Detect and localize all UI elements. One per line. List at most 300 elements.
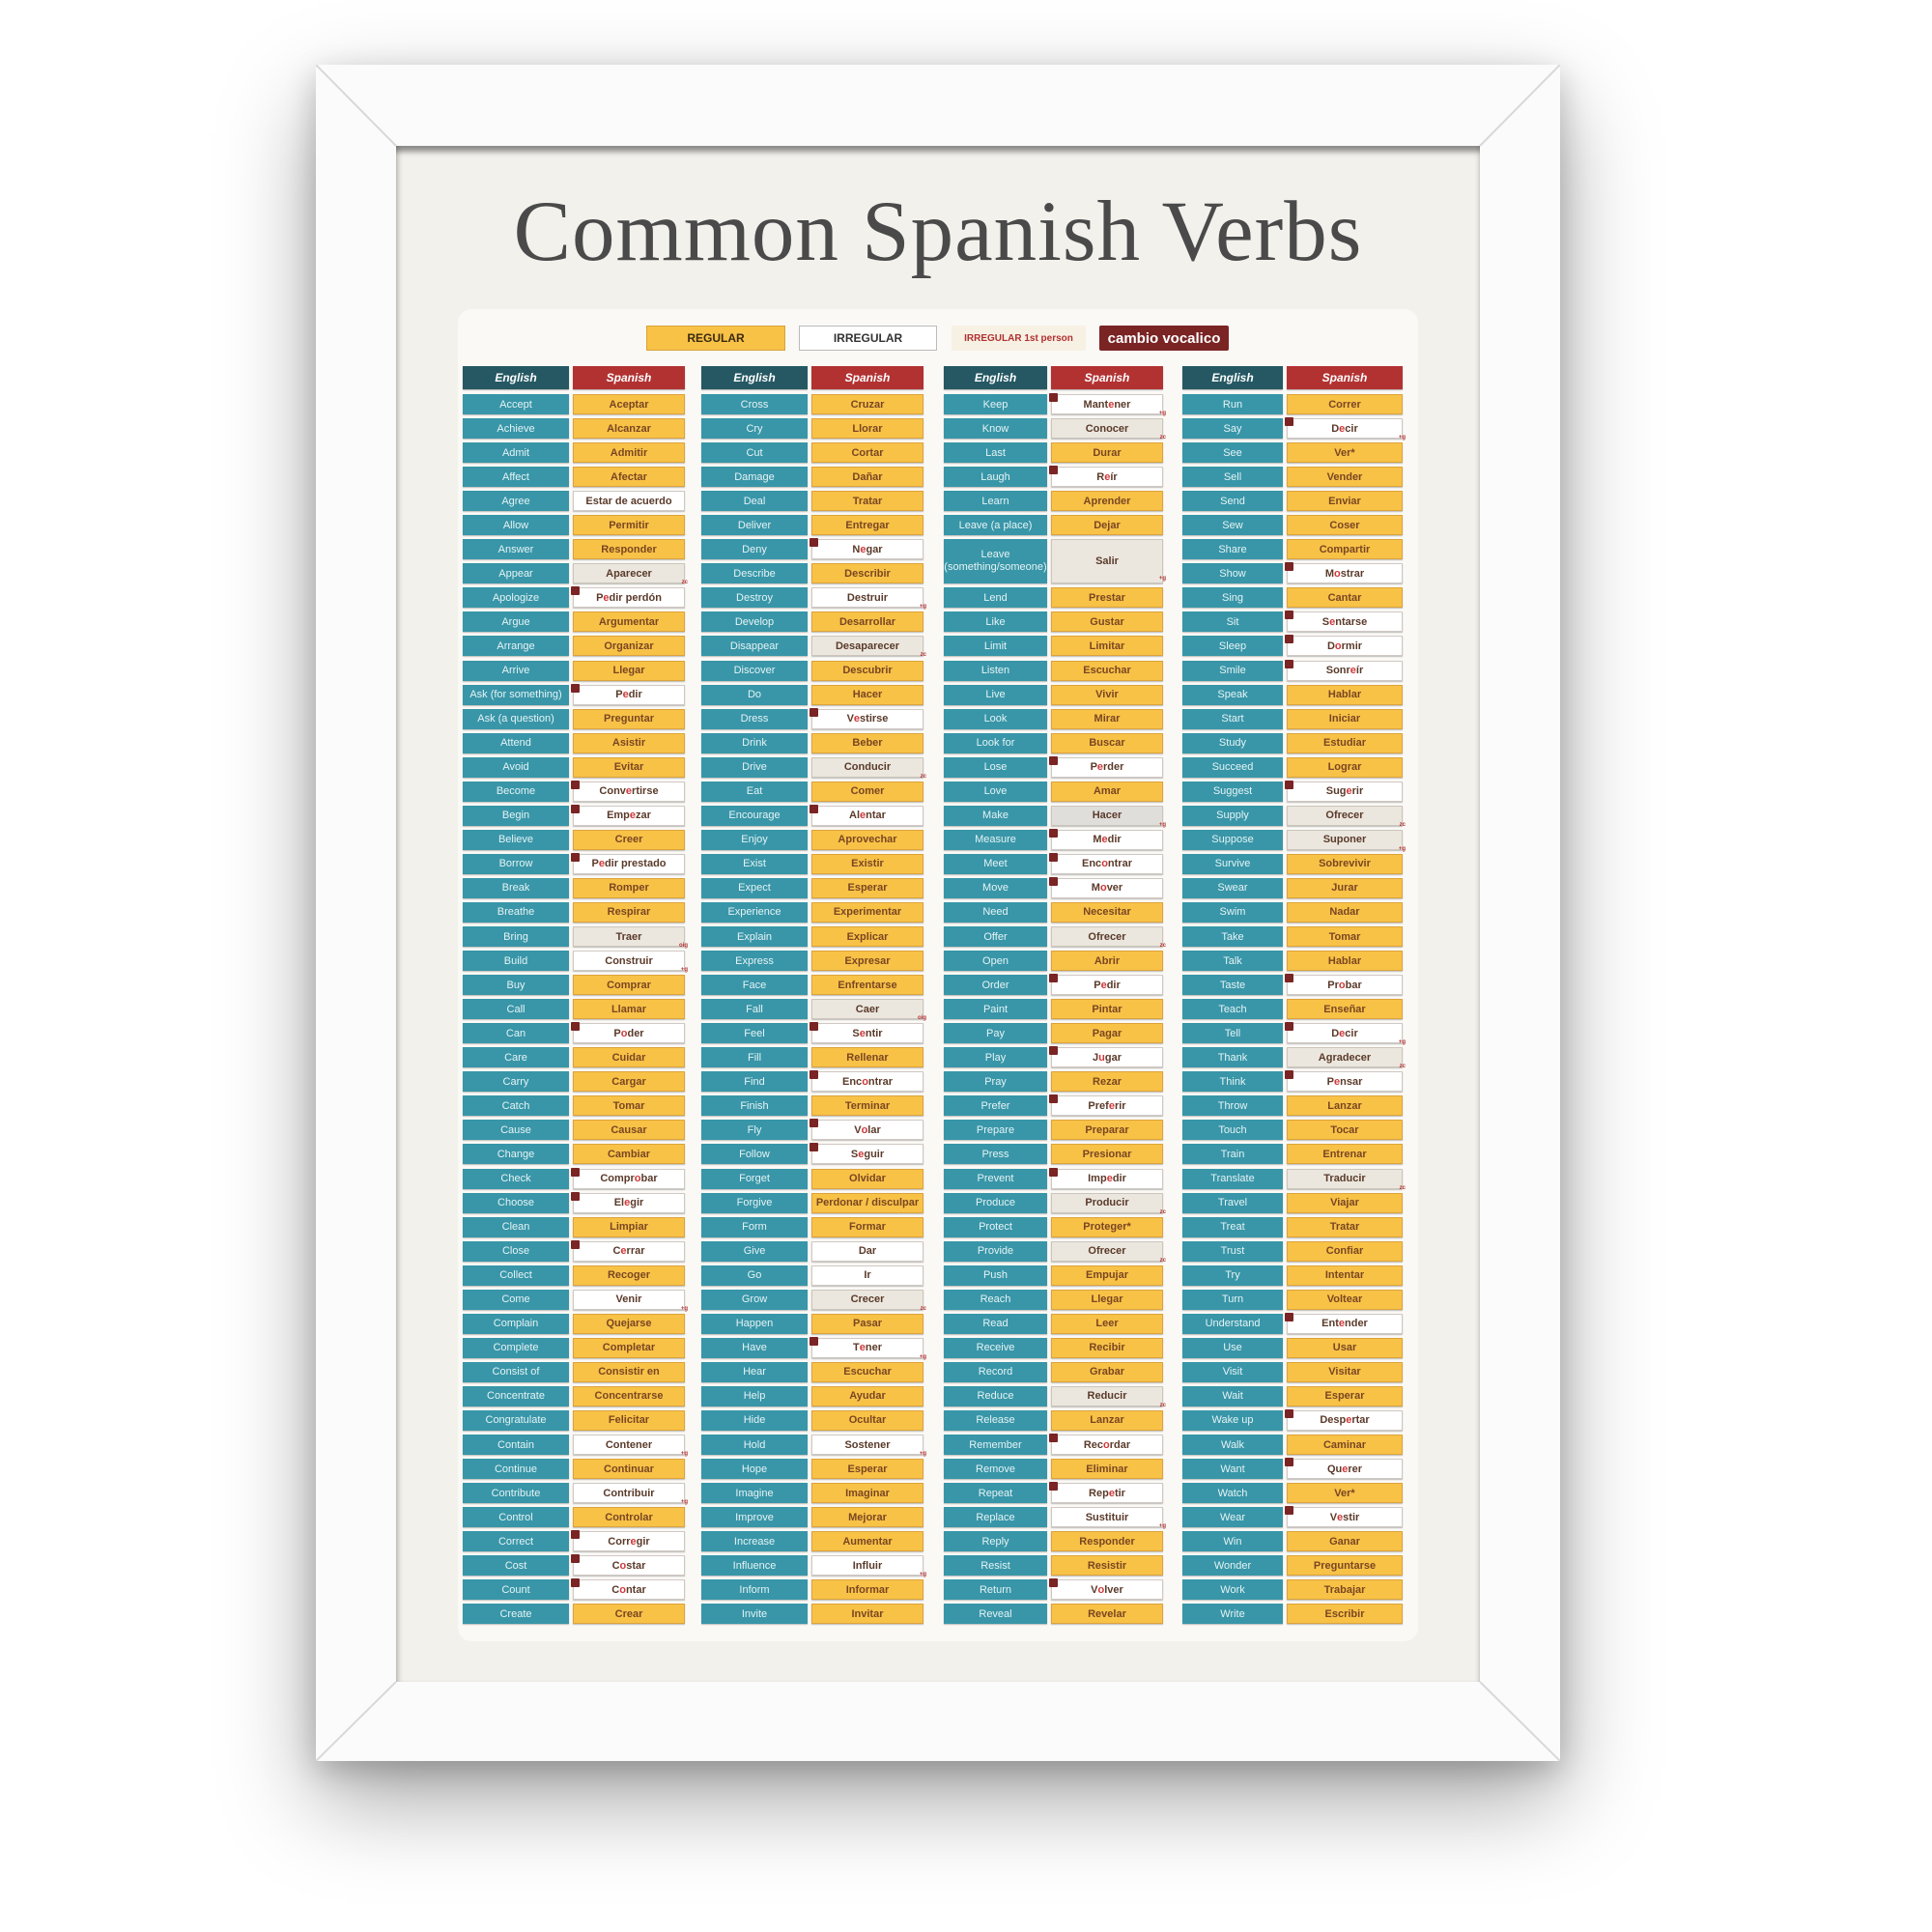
panel: column 4: Suggest <box>1213 785 1252 797</box>
panel: column 2: Encourage <box>728 810 781 821</box>
panel: column 1: Appear <box>498 568 533 580</box>
panel: column 2: Feel <box>744 1028 765 1039</box>
panel: column 1: Organizar <box>604 640 654 652</box>
panel: column 4: Compartir <box>1320 544 1370 555</box>
panel: column 1: Compr bar <box>600 1173 658 1184</box>
panel: column 4: Survive <box>1215 858 1250 869</box>
panel: column 4: Trabajar <box>1324 1584 1365 1596</box>
panel: column 1: Answer <box>498 544 533 555</box>
panel: column 2: Enc ntrar <box>842 1076 893 1088</box>
panel: column 2: Explain <box>737 931 772 943</box>
panel: column 3: zc <box>1160 435 1166 440</box>
panel: column 3: Need <box>982 906 1009 918</box>
panel: column 3: Recibir <box>1089 1342 1125 1353</box>
panel: column 4: Enseñar <box>1323 1004 1366 1015</box>
panel: column 4: Usar <box>1333 1342 1356 1353</box>
panel: column 2: V lar <box>854 1124 881 1136</box>
panel: column 2: Experimentar <box>834 906 901 918</box>
panel: column 1: Cost <box>505 1560 526 1572</box>
panel: column 1: Believe <box>498 834 533 845</box>
panel: column 1: Traer <box>616 931 641 943</box>
legend: cambio vocalico: cambio vocalico <box>1108 330 1220 346</box>
panel: column 4: Ver* <box>1334 447 1355 459</box>
panel: column 1: Causar <box>611 1124 647 1136</box>
panel: column 1: Check <box>500 1173 531 1184</box>
panel: column 3: Look <box>984 713 1007 724</box>
panel: column 2: Have <box>742 1342 767 1353</box>
panel: column 3: Produce <box>976 1197 1015 1208</box>
panel: column 4: Vender <box>1327 471 1362 483</box>
panel: column 2: T ner <box>853 1342 882 1353</box>
panel: column 3: Amar <box>1094 785 1121 797</box>
panel: column 3: Open <box>982 955 1009 967</box>
panel: column 3: +g <box>1159 1523 1166 1529</box>
panel: column 3: zc <box>1160 943 1166 949</box>
panel: column 3: o <box>1103 1439 1110 1451</box>
panel: column 1: Ask (a question) <box>477 713 554 724</box>
panel: column 2: Terminar <box>845 1100 890 1112</box>
panel: column 2: Happen <box>736 1318 773 1329</box>
legend: irregular: IRREGULAR <box>834 331 902 345</box>
title: Common Spanish Verbs <box>514 185 1362 279</box>
panel: column 3: Pay <box>986 1028 1005 1039</box>
panel: column 4: Thank <box>1218 1052 1247 1064</box>
panel: column 4: Entrenar <box>1322 1149 1367 1160</box>
panel: column 3: Sustituir <box>1086 1512 1128 1523</box>
panel: column 2: Existir <box>851 858 884 869</box>
panel: column 1: e <box>620 1245 627 1257</box>
panel: column 3: Provide <box>978 1245 1013 1257</box>
panel: column 3: Aprender <box>1084 496 1130 507</box>
panel: column 4: e <box>1350 665 1356 676</box>
panel: column 2: Describir <box>844 568 891 580</box>
panel: column 3: Necesitar <box>1083 906 1131 918</box>
panel: column 1: Romper <box>609 882 649 894</box>
panel: column 2: Descubrir <box>842 665 893 676</box>
panel: column 4: Tell <box>1225 1028 1240 1039</box>
panel: column 4: Ganar <box>1329 1536 1360 1548</box>
panel: column 1: Felicitar <box>609 1414 649 1426</box>
panel: column 4: Smile <box>1219 665 1246 676</box>
panel: column 4: Visit <box>1223 1366 1242 1378</box>
panel: column 3: Llegar <box>1091 1293 1122 1305</box>
panel: column 3: e <box>1104 471 1110 483</box>
panel: column 3: Paint <box>983 1004 1008 1015</box>
panel: column 2: +g <box>920 1572 926 1577</box>
panel: column 2: Experience <box>727 906 781 918</box>
panel: column 4: Tratar <box>1330 1221 1359 1233</box>
panel: column 3: P dir <box>1094 980 1121 991</box>
panel: column 1: Evitar <box>614 761 643 773</box>
panel: column 2: +g <box>920 1451 926 1457</box>
panel: column 1: Accept <box>499 398 532 410</box>
panel: column 4: e <box>1329 616 1335 628</box>
panel: column 2: Go <box>748 1269 761 1281</box>
panel: column 3: Ofrecer <box>1088 1245 1126 1257</box>
panel: column 3: Mirar <box>1094 713 1120 724</box>
panel: column 3: Release <box>976 1414 1015 1426</box>
panel: column 2: Ocultar <box>849 1414 886 1426</box>
panel: column 2: V stirse <box>847 713 888 724</box>
panel: column 1: Venir <box>616 1293 641 1305</box>
panel: column 3: Order <box>981 980 1009 991</box>
panel: column 1: Congratulate <box>485 1414 547 1426</box>
panel: column 3: Ofrecer <box>1088 931 1126 943</box>
panel: column 3: e <box>1107 1173 1113 1184</box>
panel: column 1: Aceptar <box>610 398 648 410</box>
panel: column 1: Choose <box>497 1197 534 1208</box>
panel: column 3: Eliminar <box>1086 1463 1128 1475</box>
panel: column 2: Imagine <box>735 1488 774 1499</box>
panel: column 2: Esperar <box>848 882 887 894</box>
panel: column 1: e <box>603 592 610 604</box>
panel: column 1: Allow <box>503 520 528 531</box>
panel: column 2: Caer <box>856 1004 879 1015</box>
panel: column 3: o <box>1100 882 1107 894</box>
panel: column 1: Argue <box>501 616 530 628</box>
panel: column 3: J gar <box>1093 1052 1122 1064</box>
panel: column 1: +g <box>681 967 688 973</box>
panel: column 2: Fill <box>748 1052 761 1064</box>
panel: column 4: Preguntarse <box>1314 1560 1376 1572</box>
panel: column 3: +g <box>1159 576 1166 582</box>
panel: column 3: Gustar <box>1090 616 1124 628</box>
panel: column 3: Know <box>982 423 1009 435</box>
panel: column 2: Cut <box>746 447 763 459</box>
panel: column 1: +g <box>681 1306 688 1312</box>
panel: column 1: Catch <box>502 1100 529 1112</box>
panel: column 2: Olvidar <box>849 1173 886 1184</box>
panel: column 1: P dir <box>615 689 642 700</box>
header 4: Spanish <box>1322 371 1367 384</box>
panel: column 3: Reduce <box>978 1390 1013 1402</box>
panel: column 2: Formar <box>849 1221 886 1233</box>
panel: column 1: e <box>599 858 605 869</box>
panel: column 2: Deny <box>742 544 767 555</box>
panel: column 3: e <box>1109 1488 1115 1499</box>
panel: column 3: e <box>1109 1100 1115 1112</box>
panel: column 3: M dir <box>1093 834 1122 845</box>
panel: column 2: Cry <box>746 423 763 435</box>
panel: column 1: Consist of <box>493 1366 539 1378</box>
panel: column 3: Reducir <box>1088 1390 1126 1402</box>
panel: column 3: Lanzar <box>1090 1414 1124 1426</box>
panel: column 4: S ntarse <box>1322 616 1367 628</box>
panel: column 4: Wear <box>1220 1512 1245 1523</box>
panel: column 1: Complete <box>493 1342 539 1353</box>
panel: column 3: Press <box>981 1149 1009 1160</box>
panel: column 1: Contribuir <box>603 1488 655 1499</box>
panel: column 1: Cargar <box>611 1076 646 1088</box>
panel: column 4: Agradecer <box>1319 1052 1371 1064</box>
panel: column 3: u <box>1098 1052 1105 1064</box>
panel: column 1: Concentrate <box>487 1390 545 1402</box>
panel: column 1: Alcanzar <box>607 423 651 435</box>
panel: column 4: Tomar <box>1329 931 1360 943</box>
panel: column 1: Attend <box>500 737 531 749</box>
panel: column 3: Responder <box>1079 1536 1135 1548</box>
panel: column 4: Watch <box>1218 1488 1247 1499</box>
panel: column 4: Visitar <box>1328 1366 1361 1378</box>
panel: column 4: Desp rtar <box>1320 1414 1370 1426</box>
panel: column 1: Bring <box>503 931 528 943</box>
panel: column 3: Preparar <box>1085 1124 1129 1136</box>
panel: column 4: Estudiar <box>1323 737 1366 749</box>
panel: column 1: Asistir <box>612 737 645 749</box>
panel: column 3: Escuchar <box>1083 665 1131 676</box>
panel: column 1: P dir perdón <box>596 592 662 604</box>
panel: column 2: Invite <box>742 1608 767 1620</box>
frame <box>316 65 1560 1761</box>
panel: column 3: Read <box>982 1318 1009 1329</box>
panel: column 1: Permitir <box>609 520 649 531</box>
panel: column 2: Eat <box>747 785 762 797</box>
panel: column 3: Move <box>982 882 1009 894</box>
panel: column 3: Pintar <box>1092 1004 1122 1015</box>
legend: cambio vocalico <box>1099 326 1229 351</box>
panel: column 4: Ver* <box>1334 1488 1355 1499</box>
panel: column 4: Pr bar <box>1327 980 1362 991</box>
panel: column 3: Pray <box>984 1076 1007 1088</box>
panel: column 4: Teach <box>1218 1004 1247 1015</box>
panel: column 2: Aumentar <box>842 1536 893 1548</box>
panel: column 3: Durar <box>1093 447 1122 459</box>
panel: column 4: Talk <box>1223 955 1242 967</box>
panel: column 4: Say <box>1224 423 1241 435</box>
panel: column 1: Break <box>502 882 529 894</box>
panel: column 1: Creer <box>615 834 642 845</box>
panel: column 3: Rec rdar <box>1084 1439 1130 1451</box>
panel: column 3: Rep tir <box>1089 1488 1125 1499</box>
legend: regular: REGULAR <box>687 331 745 345</box>
panel: column 4: Caminar <box>1323 1439 1366 1451</box>
panel: column 2: e <box>858 1149 864 1160</box>
panel: column 1: Correct <box>498 1536 533 1548</box>
panel: column 3: Repeat <box>979 1488 1012 1499</box>
panel: column 2: Comer <box>851 785 884 797</box>
panel: column 3: Empujar <box>1086 1269 1128 1281</box>
panel: column 4: Hablar <box>1328 689 1361 700</box>
panel: column 2: Dañar <box>852 471 883 483</box>
panel: column 3: Reach <box>980 1293 1010 1305</box>
panel: column 4: Take <box>1221 931 1244 943</box>
panel: column 2: Conducir <box>844 761 891 773</box>
panel: column 3: Last <box>985 447 1006 459</box>
panel: column 3: P rder <box>1091 761 1123 773</box>
panel: column 1: Recoger <box>608 1269 650 1281</box>
panel: column 2: Esperar <box>848 1463 887 1475</box>
legend: irregular 1st person <box>952 326 1086 351</box>
panel: column 4: e <box>1346 1414 1351 1426</box>
panel: column 4: Wake up <box>1211 1414 1254 1426</box>
panel: column 1: oig <box>679 943 688 949</box>
panel: column 1: Borrow <box>499 858 532 869</box>
panel: column 3: e <box>1101 834 1108 845</box>
panel: column 4: Swim <box>1220 906 1245 918</box>
panel: column 4: Train <box>1221 1149 1244 1160</box>
panel: column 4: Send <box>1220 496 1245 507</box>
panel: column 1: Clean <box>502 1221 529 1233</box>
panel: column 1: C star <box>612 1560 645 1572</box>
panel: column 4: Ent nder <box>1321 1318 1368 1329</box>
panel: column 4: Start <box>1221 713 1244 724</box>
panel: column 3: Leer <box>1095 1318 1119 1329</box>
panel: column 2: Forget <box>739 1173 770 1184</box>
header 1: Spanish <box>607 371 651 384</box>
panel: column 1: Affect <box>502 471 529 483</box>
panel: column 2: Llorar <box>852 423 883 435</box>
panel: column 3: Look for <box>977 737 1014 749</box>
legend: irregular 1st person: IRREGULAR 1st person <box>964 332 1073 344</box>
panel: column 2: Mejorar <box>848 1512 887 1523</box>
panel: column 2: Beber <box>852 737 883 749</box>
panel: column 2: Invitar <box>851 1608 883 1620</box>
header 3: English <box>975 371 1016 384</box>
panel: column 2: Deal <box>744 496 765 507</box>
panel: column 2: oig <box>918 1015 926 1021</box>
panel: column 4: Cantar <box>1328 592 1361 604</box>
panel: column 4: Succeed <box>1212 761 1253 773</box>
panel: column 2: Do <box>748 689 761 700</box>
panel: column 1: Achieve <box>497 423 535 435</box>
panel: column 4: Want <box>1220 1463 1245 1475</box>
panel: column 2: e <box>860 1028 866 1039</box>
panel: column 3: Enc ntrar <box>1082 858 1132 869</box>
panel: column 4: Win <box>1224 1536 1241 1548</box>
panel: column 2: Finish <box>740 1100 769 1112</box>
panel: column 4: e <box>1334 1076 1340 1088</box>
panel: column 1: Care <box>504 1052 527 1064</box>
panel: column 4: Swear <box>1217 882 1248 894</box>
table card <box>458 309 1418 1641</box>
panel: column 1: e <box>631 1536 637 1548</box>
panel: column 4: e <box>1339 1028 1345 1039</box>
panel: column 4: e <box>1337 1512 1343 1523</box>
panel: column 2: o <box>862 1124 867 1136</box>
panel: column 3 <box>943 366 1166 1625</box>
panel: column 4: Intentar <box>1325 1269 1364 1281</box>
header 4: English <box>1211 371 1254 384</box>
panel: column 1: o <box>635 1173 641 1184</box>
panel: column 4: Treat <box>1220 1221 1245 1233</box>
panel: column 1: Build <box>504 955 527 967</box>
panel: column 2: e <box>860 810 866 821</box>
panel: column 3: o <box>1098 1584 1104 1596</box>
panel: column 4: Walk <box>1221 1439 1244 1451</box>
panel: column 1: Controlar <box>605 1512 653 1523</box>
panel: column 3: Receive <box>977 1342 1014 1353</box>
panel: column 3: Record <box>979 1366 1012 1378</box>
panel: column 4: Touch <box>1218 1124 1247 1136</box>
panel: column 1: Breathe <box>497 906 534 918</box>
panel: column 1: Estar de acuerdo <box>585 496 672 507</box>
panel: column 3: Learn <box>981 496 1009 507</box>
panel: column 2: Discover <box>734 665 775 676</box>
panel: column 4: D cir <box>1331 1028 1358 1039</box>
panel: column 3: Keep <box>983 398 1008 410</box>
header 4 <box>1182 366 1403 390</box>
panel: column 2: Al ntar <box>849 810 886 821</box>
panel: column 4: Understand <box>1206 1318 1260 1329</box>
panel: column 2: Informar <box>846 1584 889 1596</box>
panel: column 3: Make <box>982 810 1009 821</box>
panel: column 3: Grabar <box>1090 1366 1124 1378</box>
panel: column 2: Hide <box>744 1414 765 1426</box>
panel: column 2: Develop <box>735 616 774 628</box>
panel: column 3: Remember <box>969 1439 1022 1451</box>
panel: column 2: Rellenar <box>846 1052 889 1064</box>
panel: column 1: Conv rtirse <box>599 785 659 797</box>
panel: column 1: o <box>621 1028 627 1039</box>
panel: column 2: Face <box>743 980 766 991</box>
panel: column 1: Responder <box>601 544 657 555</box>
panel: column 3: Producir <box>1085 1197 1129 1208</box>
panel: column 3: Presionar <box>1083 1149 1131 1160</box>
panel: column 1: Buy <box>507 980 525 991</box>
panel: column 1: o <box>619 1584 626 1596</box>
panel: column 2: Describe <box>733 568 776 580</box>
panel: column 4: Taste <box>1220 980 1245 991</box>
panel: column 3: Dejar <box>1094 520 1121 531</box>
panel: column 4: zc <box>1400 1064 1406 1069</box>
panel: column 3: Limit <box>984 640 1007 652</box>
panel: column 3: Listen <box>981 665 1009 676</box>
panel: column 1: Cause <box>500 1124 531 1136</box>
panel: column 2: Destruir <box>847 592 888 604</box>
panel: column 4: Traducir <box>1323 1173 1366 1184</box>
panel: column 4: +g <box>1399 1039 1406 1045</box>
header 1: English <box>495 371 537 384</box>
panel: column 4: Speak <box>1217 689 1248 700</box>
panel: column 1: Come <box>501 1293 530 1305</box>
panel: column 1: Arrive <box>502 665 529 676</box>
panel: column 3: Leave (something/someone) <box>944 549 1047 573</box>
panel: column 1: C ntar <box>611 1584 646 1596</box>
panel: column 4: Sonr ír <box>1326 665 1363 676</box>
panel: column 1: Crear <box>615 1608 642 1620</box>
panel: column 2: Express <box>735 955 774 967</box>
panel: column 4: o <box>1334 568 1341 580</box>
panel: column 2: S ntir <box>852 1028 883 1039</box>
panel: column 3: Conocer <box>1086 423 1128 435</box>
panel: column 3: Vivir <box>1095 689 1119 700</box>
panel: column 1: Corr gir <box>608 1536 650 1548</box>
panel: column 4: e <box>1342 1463 1348 1475</box>
panel: column 3: Mant ner <box>1084 398 1130 410</box>
panel: column 4: Lanzar <box>1327 1100 1362 1112</box>
panel: column 1: Apologize <box>493 592 539 604</box>
panel: column 2: Hacer <box>853 689 882 700</box>
panel: column 2: Forgive <box>737 1197 772 1208</box>
panel: column 2: Damage <box>734 471 775 483</box>
panel: column 4: Share <box>1218 544 1247 555</box>
panel: column 3: Limitar <box>1090 640 1124 652</box>
panel: column 2: +g <box>920 1354 926 1360</box>
panel: column 3: R ír <box>1096 471 1118 483</box>
panel: column 2: Desaparecer <box>836 640 899 652</box>
panel: column 3: Replace <box>976 1512 1015 1523</box>
panel: column 3: Leave (a place) <box>959 520 1032 531</box>
panel: column 4: Use <box>1223 1342 1242 1353</box>
panel: column 2: Tratar <box>853 496 882 507</box>
panel: column 4: +g <box>1399 846 1406 852</box>
panel: column 3: Love <box>984 785 1007 797</box>
panel: column 3: e <box>1097 761 1103 773</box>
panel: column 4: Sell <box>1224 471 1241 483</box>
panel: column 2: +g <box>920 604 926 610</box>
panel: column 4: D cir <box>1331 423 1358 435</box>
panel: column 4: M strar <box>1325 568 1364 580</box>
